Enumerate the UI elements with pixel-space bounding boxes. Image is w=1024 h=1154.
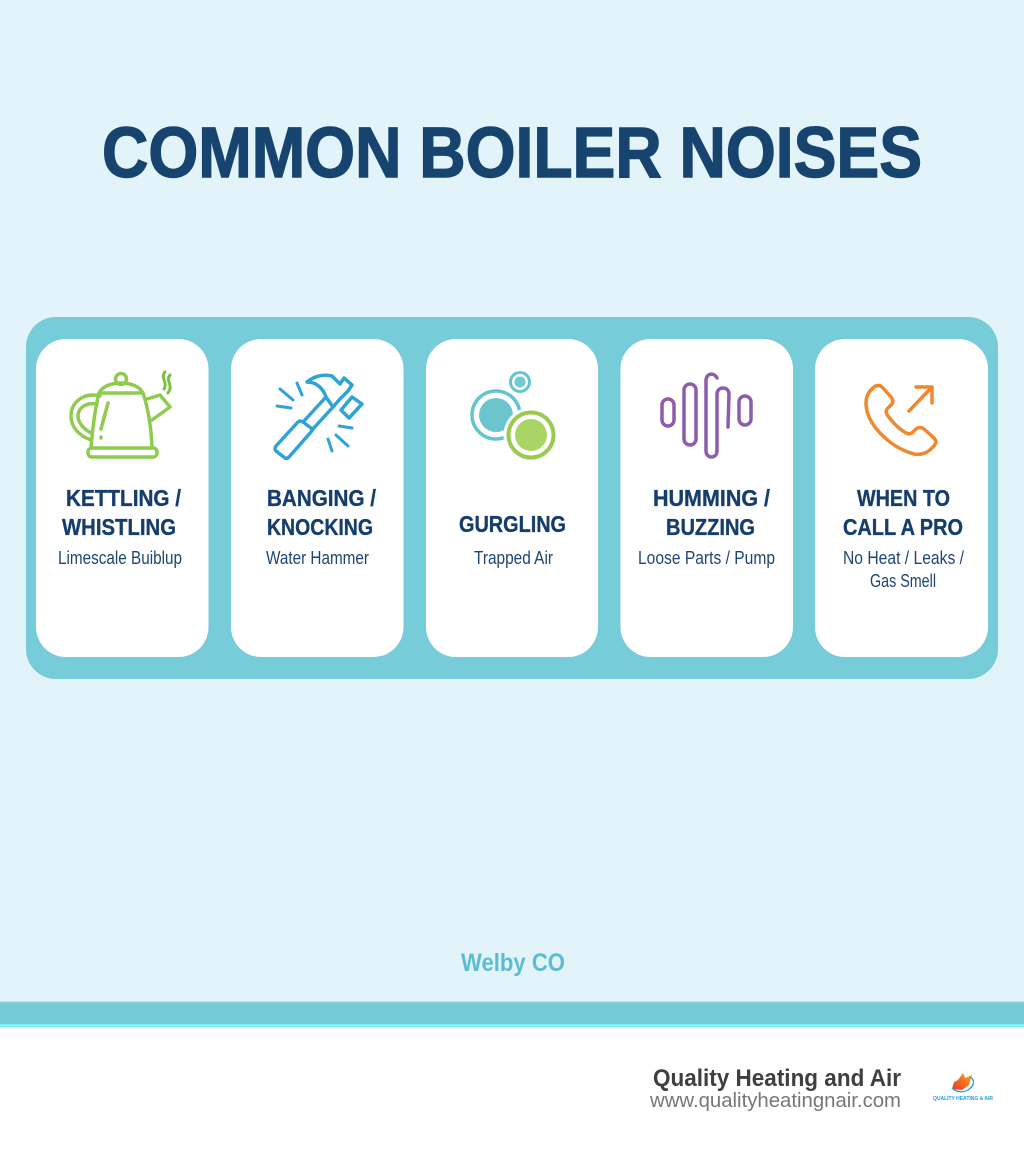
icon: sound wave (662, 374, 751, 457)
heading: when to call (843, 485, 963, 540)
logo (933, 1073, 993, 1102)
description: warning signs: Gas Smell (870, 571, 936, 591)
description: trapped air: Trapped Air (474, 548, 553, 568)
description: water hammer: Water Hammer (266, 548, 369, 568)
company website: www.qualityheatingnair.com (649, 1090, 901, 1112)
company name: Quality Heating and Air (653, 1065, 901, 1092)
description: limescale: Limescale Buiblup (58, 548, 182, 568)
heading: kettling (62, 485, 181, 540)
heading: banging: KNOCKING (267, 514, 373, 540)
description: warning signs (843, 548, 964, 591)
card: banging / knocking (231, 339, 404, 657)
card: when to call a pro (815, 339, 988, 657)
card: humming / buzzing (620, 339, 793, 657)
icon: phone with arrow (866, 386, 936, 454)
heading: humming (653, 485, 770, 540)
location label: Welby CO (461, 949, 565, 977)
icon: kettle (71, 372, 170, 457)
card: gurgling (426, 339, 598, 657)
icon: hammer (275, 375, 362, 458)
icon: bubbles (472, 372, 558, 462)
panel: noise cards band (26, 317, 998, 679)
card: kettling / whistling (36, 339, 208, 657)
title: COMMON BOILER NOISES (102, 114, 922, 193)
description: loose parts: Loose Parts / Pump (638, 548, 775, 568)
heading: when to call: WHEN TO (857, 485, 950, 511)
heading: humming: BUZZING (666, 514, 755, 540)
description: warning signs: No Heat / Leaks / (843, 548, 964, 568)
heading: kettling: WHISTLING (62, 514, 176, 540)
heading: banging: BANGING / (267, 485, 376, 511)
footer band (0, 1001, 1024, 1154)
heading: humming: HUMMING / (653, 485, 770, 511)
heading: gurgling: GURGLING (459, 511, 566, 537)
logo: QUALITY HEATING & AIR (933, 1096, 993, 1102)
heading: when to call: CALL A PRO (843, 514, 963, 540)
heading: banging (267, 485, 376, 540)
heading: kettling: KETTLING / (66, 485, 181, 511)
